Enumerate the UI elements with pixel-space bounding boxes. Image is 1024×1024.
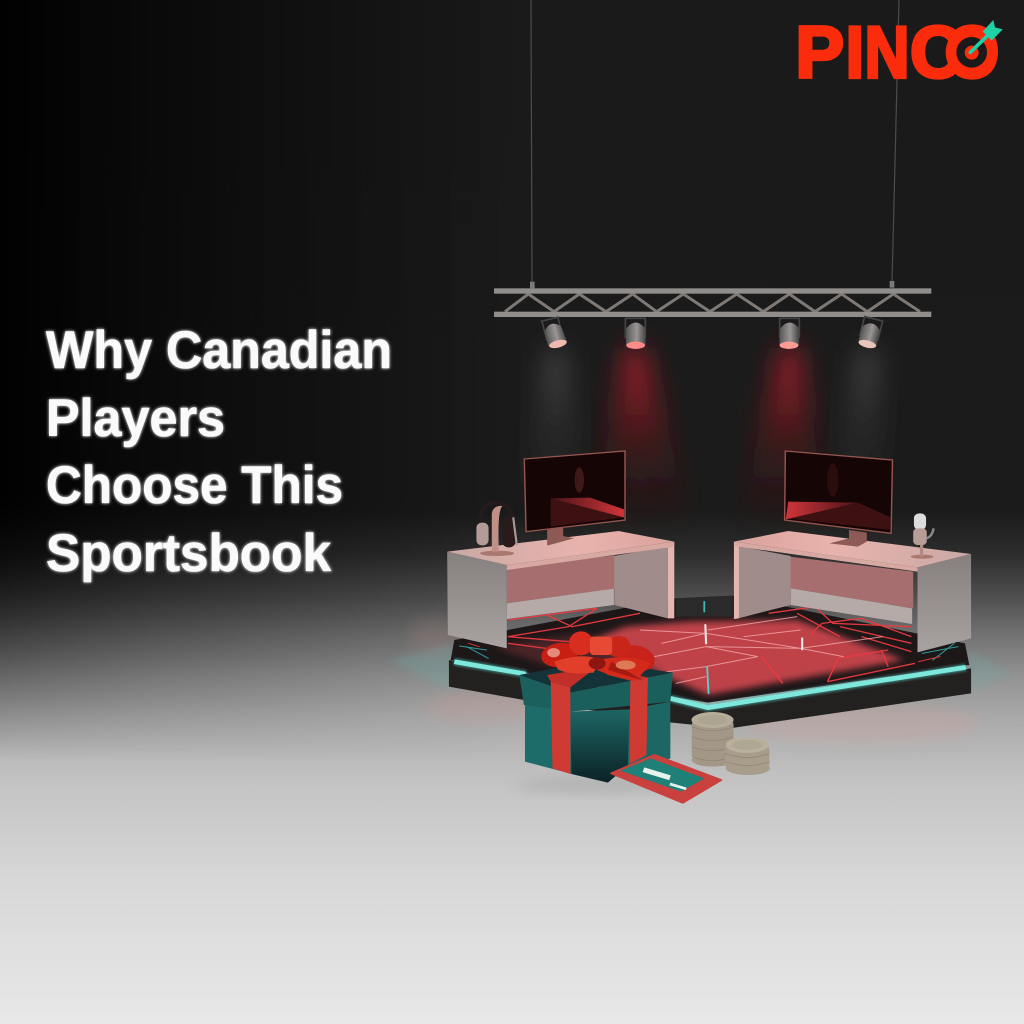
heading: Choose This	[46, 456, 343, 515]
ribbon	[547, 667, 648, 774]
coin stacks	[691, 712, 770, 775]
logo: PINCO: P	[795, 12, 844, 93]
bonus ticket	[611, 755, 721, 803]
lighting truss with four spotlights	[494, 281, 931, 350]
icon: microphone	[911, 513, 934, 559]
spotlight 3	[779, 318, 800, 349]
heading: Sportsbook	[46, 524, 332, 583]
icon: target and arrow	[951, 20, 1003, 73]
logo: PINCO: C	[910, 12, 963, 93]
logo: PINCO	[795, 11, 1003, 94]
heading	[46, 321, 392, 583]
floor glow around stage	[390, 617, 1011, 792]
spotlight 2	[625, 318, 646, 349]
light beams	[520, 348, 885, 530]
right monitor	[785, 451, 892, 547]
bow	[539, 631, 658, 681]
heading: Why Canadian	[46, 321, 392, 380]
spotlight 1	[541, 316, 568, 350]
hanging cables	[531, 0, 899, 283]
logo: PINCO: O	[945, 13, 999, 94]
neon edge	[454, 662, 966, 708]
stage platform	[449, 596, 971, 728]
left desk	[447, 531, 674, 648]
scene: stage, desks, gift	[390, 451, 1011, 803]
logo: PINCO: N	[865, 13, 909, 93]
left monitor	[524, 451, 625, 546]
heading: Players	[46, 389, 225, 448]
right desk	[734, 531, 971, 652]
gift box	[519, 631, 673, 783]
icon: headphones on stand	[476, 503, 517, 556]
truss	[494, 281, 931, 317]
stage floor lines	[508, 607, 915, 683]
spotlight 4	[857, 316, 883, 350]
logo: PINCO: I	[846, 11, 864, 93]
